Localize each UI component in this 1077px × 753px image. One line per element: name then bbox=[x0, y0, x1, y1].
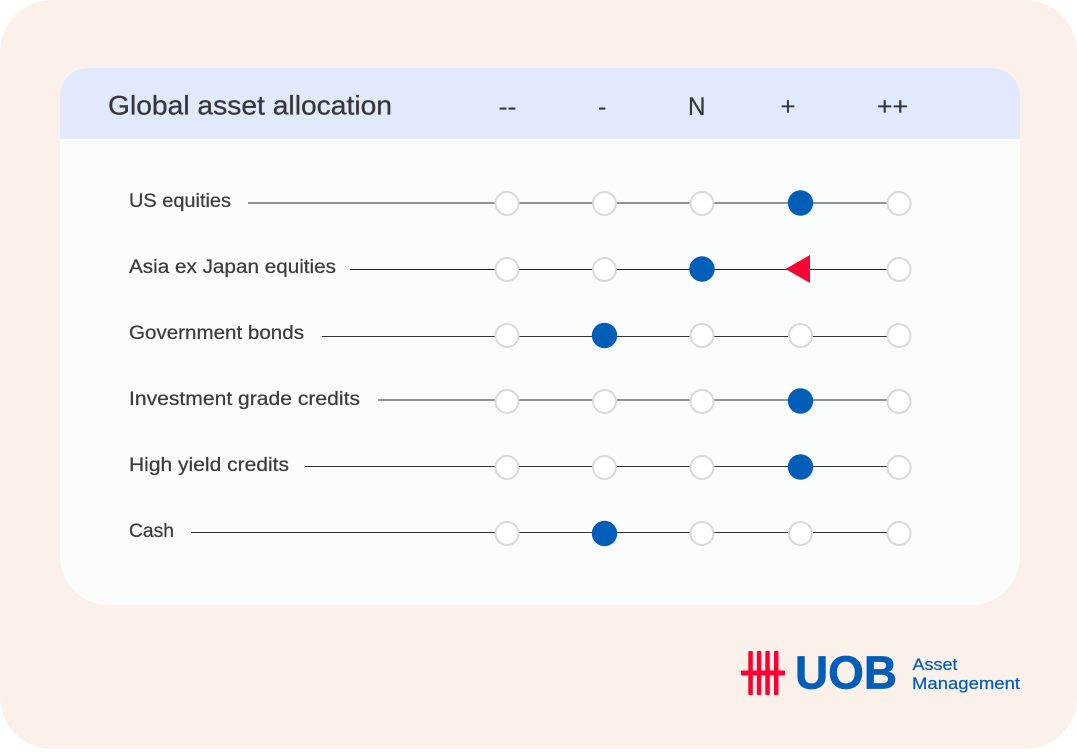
scale labels: + bbox=[780, 92, 796, 120]
row: Investment grade credits: Investment grade credits bbox=[129, 388, 360, 410]
scale labels: - bbox=[598, 93, 606, 121]
scale labels bbox=[498, 92, 908, 121]
row: Cash: Cash bbox=[129, 520, 174, 542]
heading: Global asset allocation bbox=[108, 90, 392, 120]
row: Government bonds bbox=[129, 322, 910, 348]
scale labels: -- bbox=[498, 93, 516, 121]
logo wordmark: UOB bbox=[795, 646, 897, 698]
row: US equities bbox=[129, 190, 910, 216]
scale labels: ++ bbox=[877, 92, 908, 120]
logo subtitle: Asset bbox=[912, 656, 958, 674]
row: Asia ex Japan equities: Asia ex Japan equities bbox=[129, 256, 336, 278]
table header band bbox=[60, 68, 1020, 139]
row: US equities: US equities bbox=[129, 190, 231, 212]
row: Investment grade credits bbox=[129, 388, 910, 414]
row: Government bonds: Government bonds bbox=[129, 322, 304, 344]
row: High yield credits: High yield credits bbox=[129, 454, 289, 476]
row: High yield credits bbox=[129, 454, 910, 480]
scale labels: N bbox=[688, 93, 706, 121]
panel: allocation table bbox=[60, 68, 1020, 605]
logo: UOB Asset Management bbox=[741, 646, 1020, 698]
logo subtitle: Management bbox=[912, 675, 1020, 693]
icon: UOB red mark bbox=[741, 651, 785, 695]
logo subtitle bbox=[912, 656, 1020, 693]
row: Cash bbox=[129, 520, 910, 546]
row: Asia ex Japan equities bbox=[129, 255, 910, 283]
